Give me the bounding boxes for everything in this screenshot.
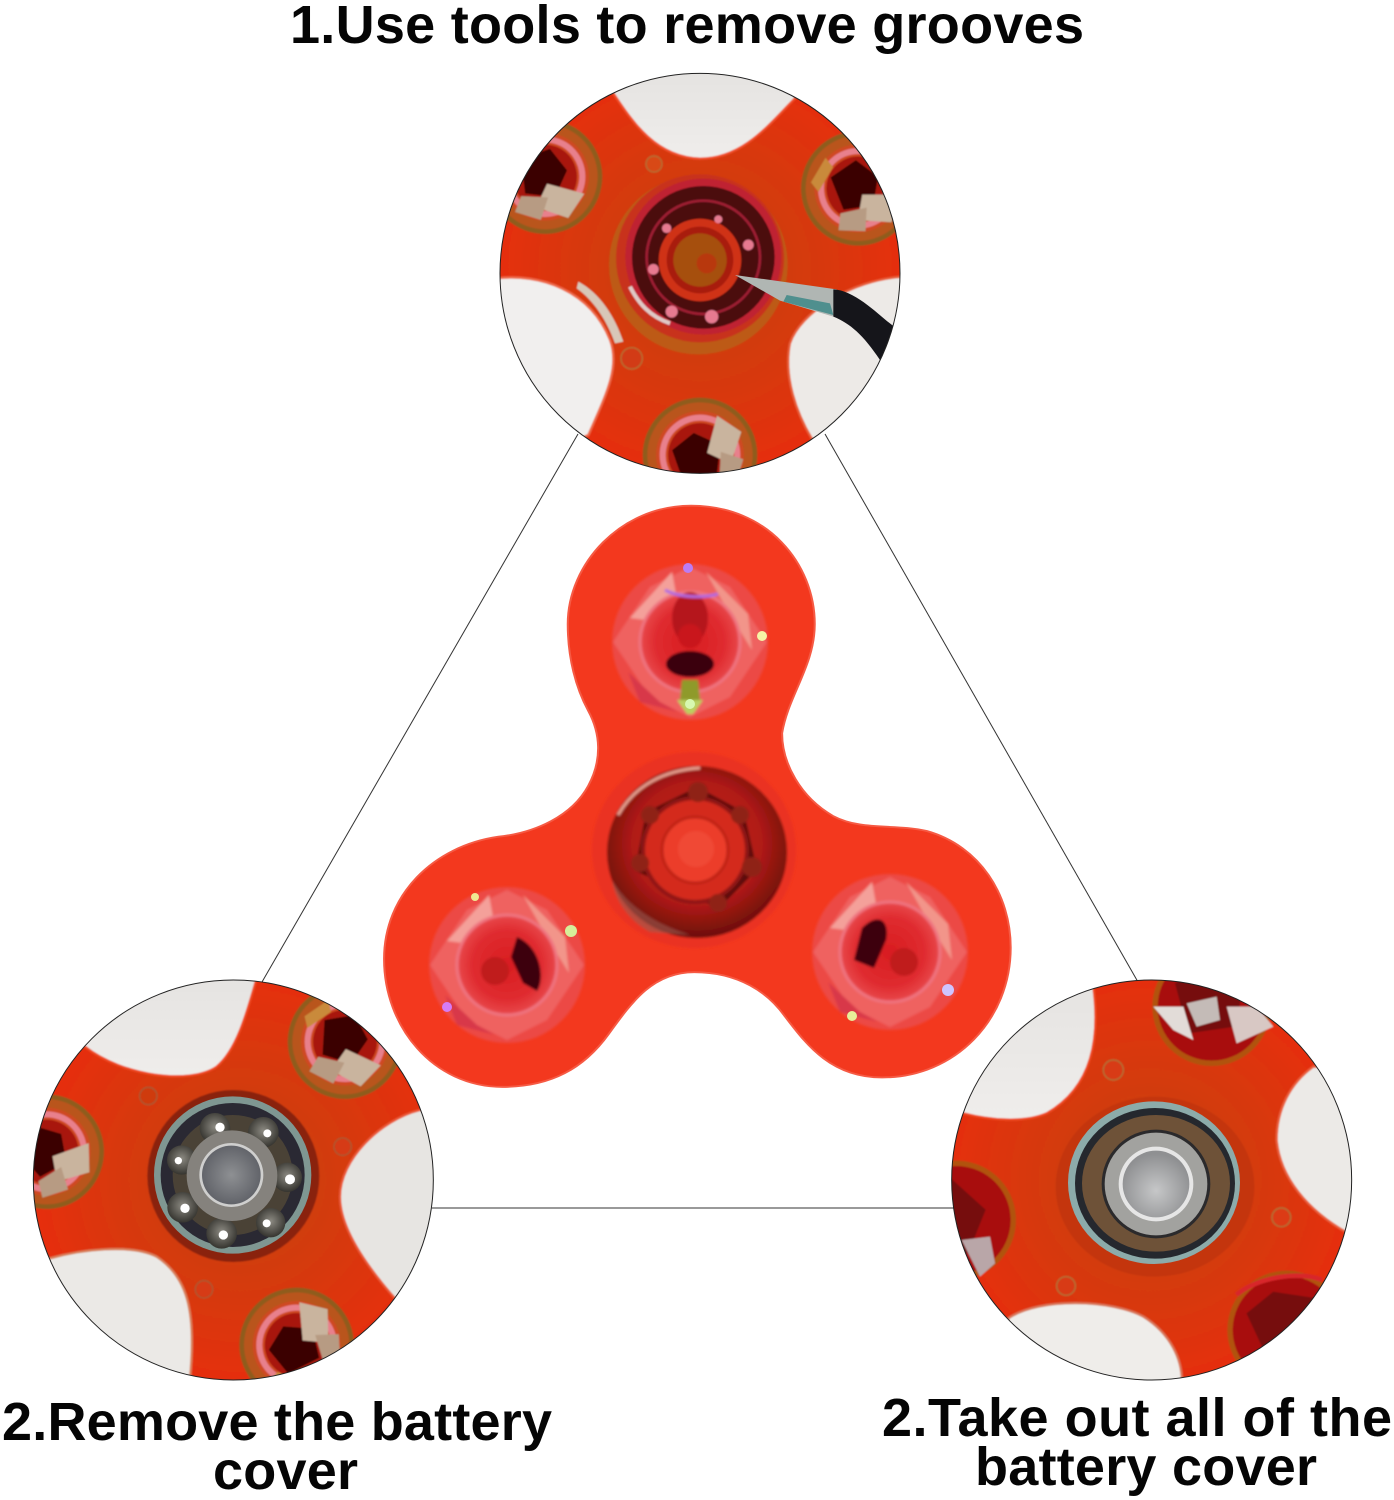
- hub: [592, 752, 796, 948]
- panel: step 2 close-up, bearing with balls: [32, 980, 434, 1380]
- caption: step 2 right: [882, 1388, 1392, 1497]
- center spinner product photo: [384, 506, 1011, 1087]
- caption: step 2 right: 2.Take out all of the: [882, 1388, 1392, 1448]
- caption: step 2 left: 2.Remove the battery: [2, 1392, 552, 1452]
- panel: step 1 close-up, tweezers at hub: [500, 72, 900, 474]
- spinner body: [384, 506, 1011, 1087]
- caption: step 2 left: cover: [213, 1441, 358, 1500]
- caption: step 2 right: battery cover: [975, 1437, 1317, 1497]
- bearing: [154, 1096, 311, 1254]
- caption: step 2 left: [2, 1392, 552, 1500]
- top jewel: [612, 563, 768, 720]
- connector lines: [262, 434, 1138, 1208]
- bearing: [1068, 1101, 1240, 1264]
- left jewel: [429, 887, 585, 1043]
- panel: step 3 close-up, cover removed: [951, 980, 1352, 1380]
- tweezers: [735, 275, 897, 360]
- right jewel: [812, 874, 968, 1030]
